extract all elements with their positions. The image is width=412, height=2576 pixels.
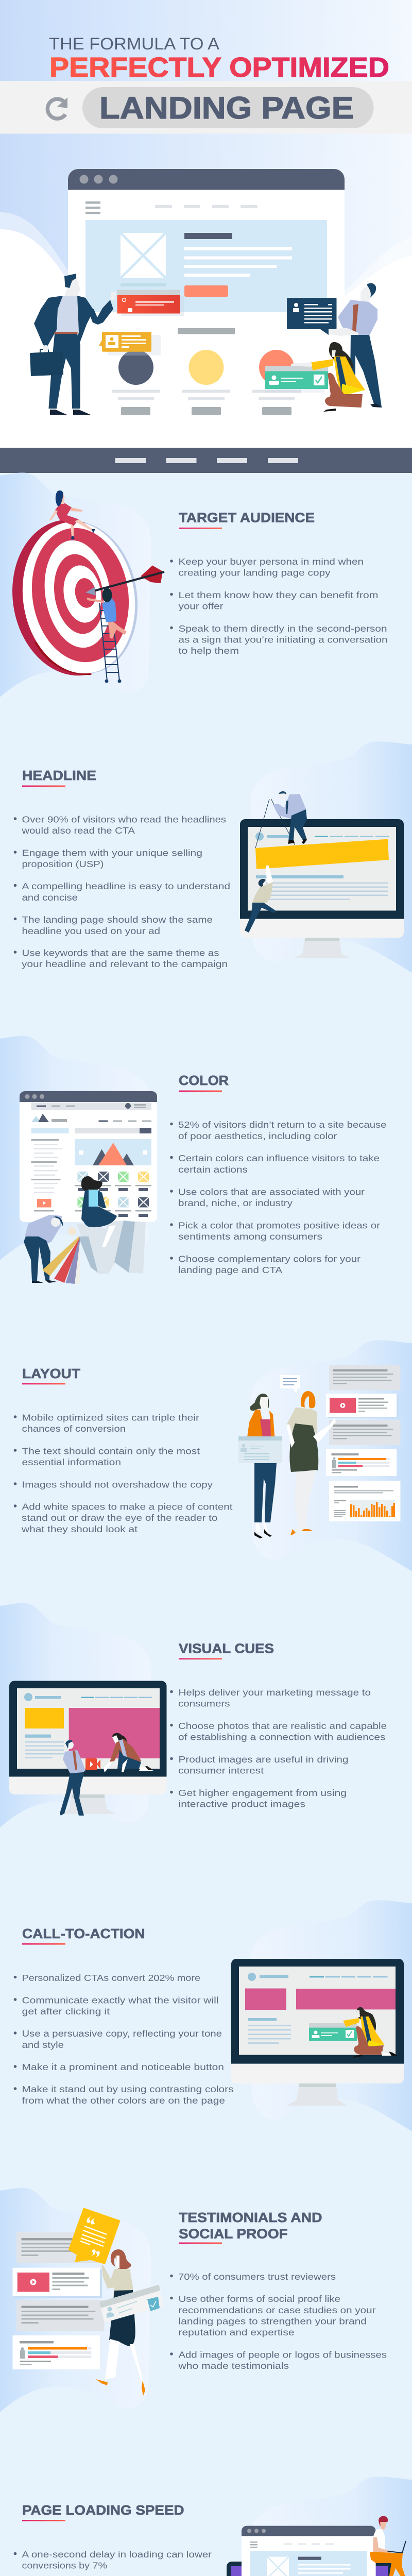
heading <box>179 2210 322 2242</box>
bullet list: brand, niche, or industry <box>178 1198 293 1208</box>
heading underline <box>179 1658 222 1659</box>
bullet list: Over 90% of visitors who read the headlines <box>22 814 226 824</box>
heading: TESTIMONIALS AND <box>179 2210 322 2225</box>
bullet list: sentiments among consumers <box>178 1231 322 1242</box>
address bar band <box>0 81 412 134</box>
heading underline <box>22 2520 65 2521</box>
bullet list: Engage them with your unique selling <box>22 848 202 858</box>
bullet list: from what the other colors are on the page <box>22 2095 225 2106</box>
bullet list: Speak to them directly in the second-person <box>178 623 387 634</box>
top band with nav tabs <box>0 448 412 473</box>
bullet list: recommendations or case studies on your <box>178 2305 376 2315</box>
bullet list: 52% of visitors didn’t return to a site because <box>178 1120 386 1130</box>
bullet list: Use other forms of social proof like <box>178 2294 340 2304</box>
bullet list: Images should not overshadow the copy <box>22 1480 213 1490</box>
bullet list <box>170 1687 387 1809</box>
illustration: two women reviewing layout blocks <box>238 1365 401 1538</box>
bullet list: Product images are useful in driving <box>178 1754 348 1765</box>
heading: COLOR <box>179 1073 229 1088</box>
bullet list <box>14 2549 219 2576</box>
bullet list: conversions by 7% <box>22 2561 107 2571</box>
heading: CALL-TO-ACTION <box>22 1926 145 1941</box>
heading: LAYOUT <box>22 1366 80 1381</box>
bullet list: of establishing a connection with audiences <box>178 1732 386 1742</box>
panel: visual cues <box>9 1640 387 1816</box>
bullet list: your offer <box>178 601 224 612</box>
bullet list: what they should look at <box>21 1524 138 1534</box>
woman in yellow jacket <box>291 342 365 412</box>
bullet list: Choose photos that are realistic and capable <box>178 1721 387 1731</box>
bullet list: Add white spaces to make a piece of content <box>22 1501 233 1512</box>
illustration: monitor with call-to-action card <box>231 1959 404 2106</box>
bullet list: Mobile optimized sites can triple their <box>22 1413 199 1423</box>
bullet list: Helps deliver your marketing message to <box>178 1687 371 1698</box>
bullet list: landing page and CTA <box>178 1265 282 1275</box>
bullet list: certain actions <box>178 1164 248 1175</box>
heading underline <box>179 528 222 529</box>
bullet list: to help them <box>178 646 239 656</box>
bullet list: consumers <box>178 1699 230 1709</box>
bullet list: consumer interest <box>178 1766 264 1776</box>
title: perfectly optimized: PERFECTLY OPTIMIZED <box>49 52 389 83</box>
bullet list: Use keywords that are the same theme as <box>22 948 219 958</box>
businessman with speech bubble <box>330 283 382 408</box>
bullet list: stand out or draw the eye of the reader to <box>22 1513 217 1523</box>
bullet list: Choose complementary colors for your <box>178 1254 360 1264</box>
panel: target audience <box>2 490 388 684</box>
heading: SOCIAL PROOF <box>179 2226 288 2242</box>
hero browser mockup <box>68 169 345 421</box>
bullet list: creating your landing page copy <box>178 568 331 578</box>
panel: color <box>20 1073 386 1284</box>
businessman with briefcase <box>30 274 116 415</box>
bullet list: who made testimonials <box>178 2361 289 2371</box>
title: the formula to a: THE FORMULA TO A <box>49 35 220 53</box>
bullet list <box>14 814 230 969</box>
panel: page loading speed <box>14 2502 410 2576</box>
bullet list: Add images of people or logos of businesses <box>178 2350 387 2360</box>
bullet list <box>14 1973 234 2106</box>
bullet list: as a sign that you’re initiating a conversation <box>178 635 387 645</box>
heading underline <box>179 2242 222 2244</box>
bullet list: The landing page should show the same <box>22 914 213 925</box>
panel: headline <box>14 768 404 969</box>
bullet list: interactive product images <box>178 1799 305 1809</box>
panel: call-to-action <box>14 1926 404 2106</box>
illustration: color palette browser <box>20 1091 157 1284</box>
bullet list: chances of conversion <box>22 1423 126 1434</box>
panel: layout <box>14 1365 400 1538</box>
heading: VISUAL CUES <box>179 1640 274 1656</box>
bullet list: 70% of consumers trust reviewers <box>178 2272 336 2282</box>
bullet list: reputation and expertise <box>178 2327 295 2337</box>
bullet list: and style <box>22 2040 64 2050</box>
bullet list: of poor aesthetics, including color <box>178 1131 337 1141</box>
bullet list: your headline and relevant to the campaign <box>22 959 228 969</box>
bullet list: Pick a color that promotes positive ideas or <box>178 1220 380 1230</box>
bullet list: Keep your buyer persona in mind when <box>178 556 364 567</box>
bullet list <box>14 1413 233 1534</box>
illustration: monitor with people <box>9 1681 167 1816</box>
bullet list: Use a persuasive copy, reflecting your tone <box>22 2028 222 2039</box>
heading: HEADLINE <box>22 768 96 783</box>
heading underline <box>22 1383 65 1384</box>
bullet list: and concise <box>22 892 78 903</box>
bullet list: Communicate exactly what the visitor will <box>22 1995 218 2005</box>
bullet list: essential information <box>22 1457 121 1467</box>
bullet list <box>170 2272 387 2371</box>
bullet list: The text should contain only the most <box>22 1446 200 1456</box>
illustration: loading page on monitor <box>227 2516 410 2576</box>
bullet list: Certain colors can influence visitors to take <box>178 1153 380 1163</box>
bullet list: Use colors that are associated with your <box>178 1187 365 1197</box>
bullet list: Let them know how they can benefit from <box>178 590 378 600</box>
bullet list: A compelling headline is easy to understand <box>22 881 230 891</box>
bullet list: Make it a prominent and noticeable button <box>22 2062 224 2072</box>
bullet list: Make it stand out by using contrasting colors <box>22 2084 234 2094</box>
heading: PAGE LOADING SPEED <box>22 2502 184 2518</box>
bullet list: headline you used on your ad <box>22 926 160 936</box>
icon: reload <box>47 97 67 118</box>
title: landing page: LANDING PAGE <box>99 91 354 125</box>
heading underline <box>179 1090 222 1092</box>
bullet list: Get higher engagement from using <box>178 1788 347 1798</box>
bullet list: would also read the CTA <box>21 825 135 836</box>
bullet list: proposition (USP) <box>22 859 104 869</box>
bullet list: landing pages to strengthen your brand <box>178 2316 367 2327</box>
green signup card <box>265 366 328 393</box>
panel: testimonials and social proof <box>12 2208 387 2396</box>
heading: TARGET AUDIENCE <box>179 510 315 526</box>
red video card <box>117 290 184 316</box>
illustration: monitor with headline banner <box>240 791 404 958</box>
yellow profile card <box>99 332 161 355</box>
heading underline <box>22 1943 65 1945</box>
illustration: woman with testimonial cards <box>12 2208 163 2396</box>
heading underline <box>22 785 65 787</box>
bullet list: get after clicking it <box>22 2006 110 2016</box>
bullet list <box>170 1120 386 1275</box>
bullet list: Personalized CTAs convert 202% more <box>22 1973 200 1983</box>
illustration: target with dart <box>2 490 164 684</box>
address bar pill <box>82 87 374 128</box>
hero background <box>0 0 412 448</box>
bullet list <box>170 556 387 656</box>
navy speech bubble <box>287 298 337 335</box>
bullet list: A one-second delay in loading can lower <box>22 2549 212 2560</box>
